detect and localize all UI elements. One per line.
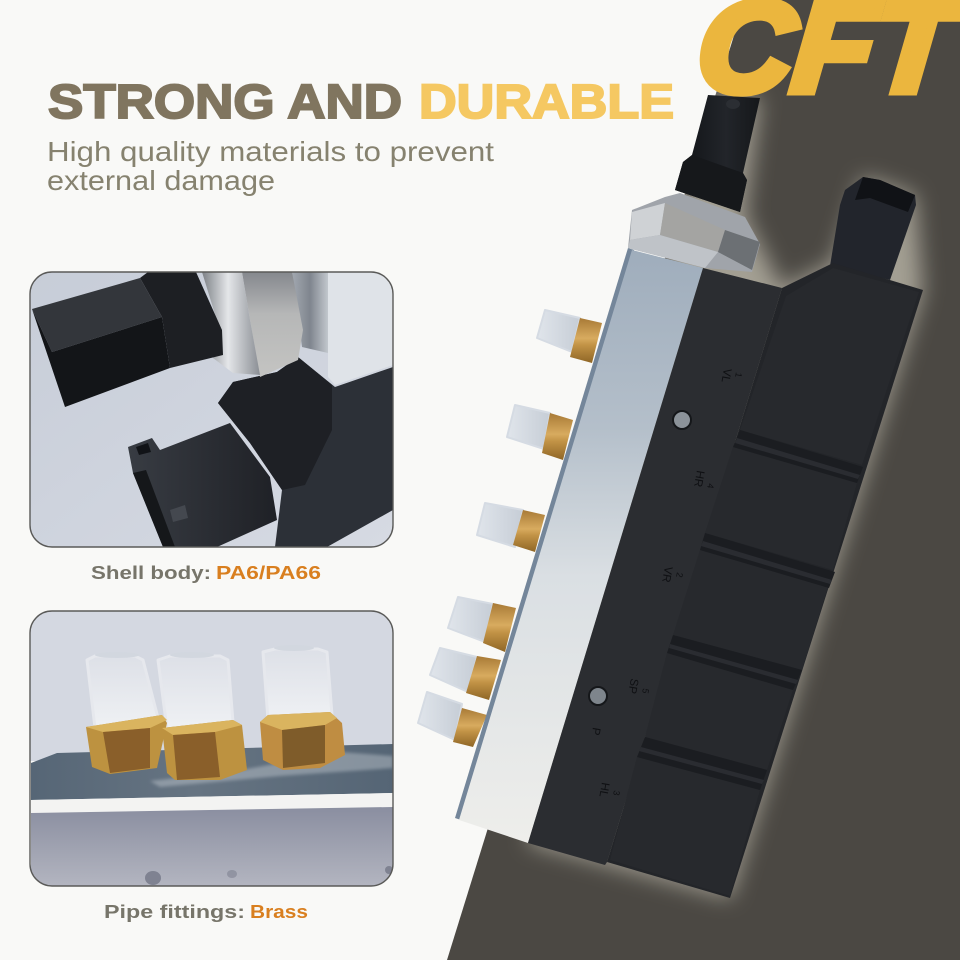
product glow halo <box>528 95 923 898</box>
port label P: P <box>589 726 602 736</box>
black cover strip <box>528 268 782 865</box>
port label SP: SP <box>625 677 640 695</box>
port label VL: VL <box>718 367 733 384</box>
hex nut <box>242 272 303 377</box>
housing grooves <box>637 430 863 790</box>
panel: shell body photo <box>30 272 393 547</box>
port label 2: 2 <box>674 572 685 578</box>
brass nut right <box>260 712 345 770</box>
fitting five <box>430 648 501 700</box>
silver ring <box>202 272 260 375</box>
caption label: Pipe fittings: <box>104 901 245 922</box>
caption: shell body <box>91 562 321 583</box>
aluminium side edge <box>455 248 634 820</box>
housing segments <box>610 268 919 896</box>
fitting three <box>477 503 545 552</box>
brass nut middle <box>162 720 247 780</box>
aluminium plate top <box>31 744 393 800</box>
caption value: Brass <box>250 901 308 922</box>
plate front edge <box>32 793 391 800</box>
upper connector <box>32 272 223 407</box>
port label HR: HR <box>691 469 706 488</box>
port label 4: 4 <box>705 483 716 489</box>
caption: pipe fittings <box>104 901 308 922</box>
subtitle <box>47 136 494 196</box>
screw bottom <box>589 687 607 705</box>
plate front face <box>31 807 393 886</box>
panel: pipe fittings photo <box>30 611 393 886</box>
heading <box>48 76 674 129</box>
caption value: PA6/PA66 <box>216 562 321 583</box>
second connector <box>830 177 916 280</box>
fitting caps <box>87 645 332 729</box>
dark diagonal background panel <box>447 0 960 960</box>
fitting one <box>537 310 602 363</box>
port label VR: VR <box>659 565 674 583</box>
subtitle line one: High quality materials to prevent <box>47 136 494 167</box>
lower connector <box>128 423 277 547</box>
product: valve block <box>418 95 923 898</box>
hex nut collar <box>628 193 760 272</box>
port label 3: 3 <box>611 790 622 796</box>
port label HL: HL <box>596 781 611 799</box>
surface pits <box>145 866 393 885</box>
heading: strong and: STRONG AND <box>48 76 402 129</box>
caption label: Shell body: <box>91 562 211 583</box>
fitting six <box>418 692 487 747</box>
port label 5: 5 <box>640 688 651 694</box>
aluminium body corner <box>328 272 393 385</box>
fitting four <box>448 597 516 652</box>
brass nut left <box>86 715 167 774</box>
heading: durable: DURABLE <box>419 76 674 129</box>
aluminium face <box>459 250 703 843</box>
subtitle line two: external damage <box>47 165 275 196</box>
upper connector <box>675 95 760 212</box>
screw top <box>673 411 691 429</box>
black valve housing <box>607 263 923 898</box>
embossed port labels <box>589 367 744 799</box>
port label 1: 1 <box>733 372 744 378</box>
black solenoid body <box>218 357 393 547</box>
chrome neck <box>292 272 328 353</box>
fitting two <box>507 405 573 460</box>
